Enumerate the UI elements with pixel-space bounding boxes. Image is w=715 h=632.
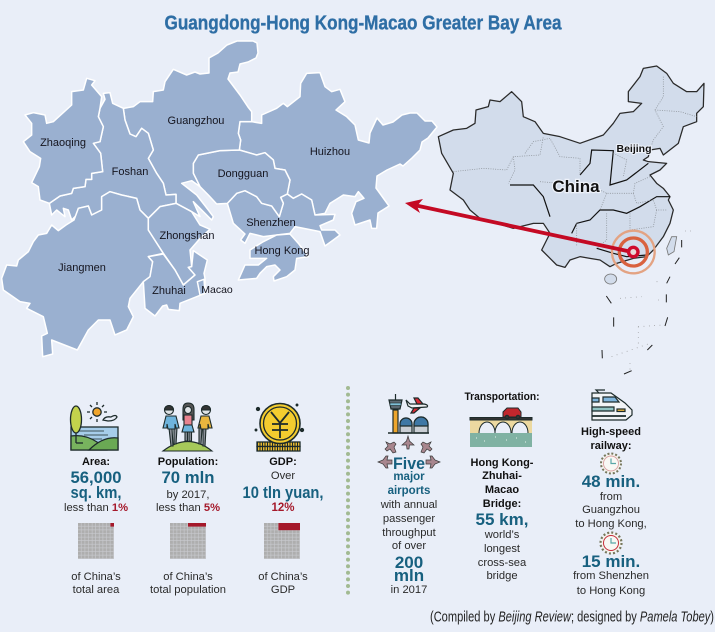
Hainan and Taiwan — [605, 237, 677, 284]
icon: landscape — [70, 402, 118, 450]
detail: from — [600, 491, 622, 503]
region: Hong Kong — [238, 234, 308, 281]
icon: bridge — [470, 408, 532, 447]
bridge name — [471, 457, 534, 510]
text block: passenger — [383, 513, 435, 525]
value: 55 km, — [476, 510, 528, 529]
caption: of China’s — [71, 571, 121, 583]
caption — [150, 571, 226, 596]
icon: five planes — [378, 436, 440, 468]
detail — [573, 570, 649, 597]
detail: less than 5% — [156, 502, 220, 514]
icon: clock — [601, 454, 621, 474]
value: 200 mln: mln — [394, 566, 424, 585]
detail: by 2017, — [167, 489, 209, 501]
detail: Over — [271, 470, 295, 482]
detail: from Shenzhen — [573, 570, 649, 582]
region: Huizhou — [238, 73, 437, 228]
text block: major — [393, 471, 425, 483]
region: Guangzhou — [123, 41, 258, 220]
panel: airports — [378, 394, 440, 596]
map labels: Zhongshan — [159, 230, 215, 242]
China outline — [438, 66, 704, 267]
China label: China — [552, 177, 600, 196]
value: 70 mln — [162, 468, 214, 487]
icon: yuan coin — [255, 404, 304, 451]
region: Zhaoqing — [23, 78, 103, 203]
icon: train — [592, 390, 632, 420]
value — [70, 468, 122, 502]
South China Sea dashes — [602, 240, 682, 374]
detail — [575, 491, 647, 530]
caption: GDP — [271, 584, 295, 596]
caption: of China’s — [258, 571, 308, 583]
map labels: Hong Kong — [254, 245, 310, 257]
caption: total area — [73, 584, 120, 596]
map: Greater Bay Area — [2, 41, 437, 357]
islands — [612, 231, 692, 370]
text block — [380, 471, 437, 552]
region: Jiangmen — [2, 192, 163, 357]
panel: railway — [573, 390, 649, 597]
panel: area — [64, 402, 128, 596]
waffle chart — [78, 523, 114, 559]
map labels: Jiangmen — [58, 262, 106, 274]
caption: total population — [150, 584, 226, 596]
target rings — [612, 231, 655, 273]
panel: GDP — [242, 404, 324, 596]
region: Dongguan — [193, 150, 290, 217]
map labels: Dongguan — [218, 168, 268, 180]
value: 200 mln — [394, 553, 424, 585]
value: five: Five — [393, 454, 425, 473]
Beijing label: Beijing — [616, 143, 652, 155]
map labels: Macao — [201, 284, 233, 296]
region: Zhongshan — [148, 203, 210, 285]
value: sq. km, — [70, 483, 122, 502]
text block: throughput — [382, 527, 437, 539]
heading: High-speed — [581, 426, 641, 438]
bridge name: Zhuhai- — [482, 470, 522, 482]
title: Guangdong-Hong Kong-Macao Greater Bay Area — [164, 12, 562, 34]
map labels: Huizhou — [310, 146, 350, 158]
panel: population — [150, 403, 226, 596]
map labels — [40, 115, 350, 297]
value: 200 mln: 200 — [395, 553, 423, 572]
value: 56,000 — [70, 468, 122, 487]
divider — [346, 388, 350, 594]
province borders — [453, 77, 697, 248]
detail: in 2017 — [391, 584, 427, 596]
detail: cross-sea — [478, 557, 527, 569]
detail: longest — [484, 543, 521, 555]
bridge name: Bridge: — [483, 498, 521, 510]
region: Shenzhen — [227, 191, 340, 246]
map labels: Zhuhai — [152, 285, 186, 297]
icon: people — [163, 403, 212, 451]
text block: airports — [388, 485, 430, 497]
value: 10 tln yuan, — [242, 483, 324, 502]
heading: Transportation: — [464, 391, 540, 403]
caption: of China’s — [163, 571, 213, 583]
detail: Guangzhou — [582, 504, 640, 516]
value: 15 min. — [582, 552, 640, 571]
map labels: Shenzhen — [246, 217, 296, 229]
target centre — [629, 247, 638, 257]
bridge name: Macao — [485, 484, 519, 496]
map labels: Zhaoqing — [40, 137, 86, 149]
heading — [581, 426, 641, 452]
detail — [478, 529, 527, 582]
heading: Population: — [158, 456, 218, 468]
map labels: Guangzhou — [168, 115, 224, 127]
detail — [156, 489, 220, 514]
detail: to Hong Kong, — [575, 518, 647, 530]
value: 48 min. — [582, 472, 640, 491]
region: Zhuhai — [143, 251, 207, 316]
detail: bridge — [486, 570, 518, 582]
bridge name: Hong Kong- — [471, 457, 534, 469]
region: Foshan — [49, 93, 176, 220]
icon: airport — [388, 394, 429, 433]
text block: with annual — [380, 499, 437, 511]
arrow — [405, 199, 632, 252]
waffle chart — [264, 523, 300, 559]
waffle chart — [170, 523, 206, 559]
map labels: Foshan — [112, 166, 148, 178]
heading: railway: — [591, 440, 631, 452]
detail: world’s — [484, 529, 520, 541]
icon: clock — [600, 532, 622, 554]
panel: bridge — [464, 391, 540, 582]
heading: Area: — [82, 456, 110, 468]
detail: to Hong Kong — [577, 585, 645, 597]
share: less than 1% — [64, 502, 128, 514]
region: Macao — [197, 279, 205, 295]
caption — [258, 571, 308, 596]
caption — [71, 571, 121, 596]
text block: of over — [392, 540, 426, 552]
map: China — [405, 66, 704, 374]
rivers — [510, 150, 670, 257]
heading: GDP: — [269, 456, 297, 468]
share: 12% — [271, 502, 295, 514]
